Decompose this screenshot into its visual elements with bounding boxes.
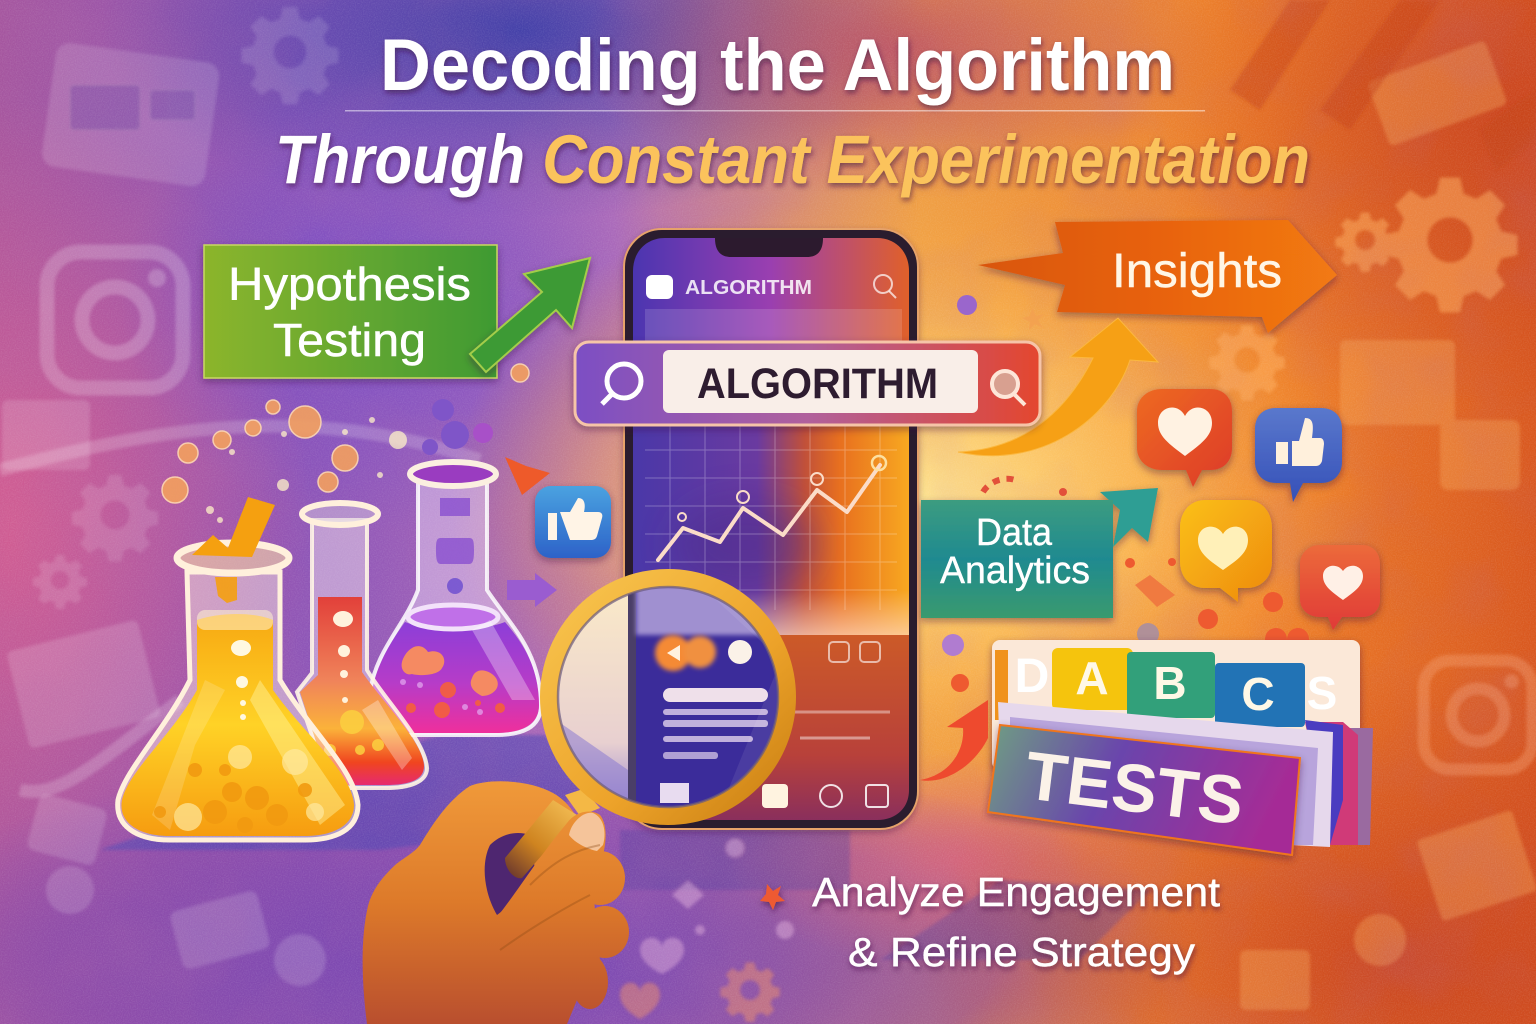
back panel and tabs: B — [1153, 657, 1187, 709]
banner: hypothesis testing — [204, 245, 590, 378]
search bar: ALGORITHM — [697, 360, 938, 408]
banner: hypothesis testing: Testing — [273, 314, 426, 366]
finger gap shadow — [485, 833, 535, 915]
magnifying glass — [549, 578, 787, 816]
icon: search left — [602, 364, 641, 404]
banner: insights arrow — [978, 220, 1337, 333]
icon: search right — [992, 371, 1025, 405]
arrow: green up-right — [470, 258, 590, 372]
app header — [646, 275, 896, 299]
icon: heart bubble small red — [1300, 545, 1380, 630]
phone screen — [633, 238, 909, 820]
phone — [624, 229, 918, 829]
phone notch — [715, 238, 823, 257]
back panel and tabs: S — [1307, 667, 1337, 719]
icon: small star — [760, 884, 785, 910]
arrow: small red left — [505, 457, 550, 495]
banner: data analytics — [921, 488, 1158, 618]
chart panel — [633, 425, 909, 635]
lower screen content — [700, 642, 890, 808]
thumb — [497, 812, 606, 960]
caption: Analyze Engagement — [812, 869, 1221, 915]
front label — [988, 725, 1300, 855]
lens — [556, 585, 781, 810]
bubbles — [162, 364, 529, 523]
banner: data analytics: Analytics — [940, 550, 1090, 592]
title — [275, 25, 1310, 198]
fingers — [572, 851, 629, 1009]
hand — [363, 781, 629, 1024]
back panel and tabs: A — [1075, 652, 1109, 704]
arrow: red to tests — [920, 700, 988, 781]
lens ring — [549, 578, 787, 816]
icon: heart bubble red — [1137, 389, 1232, 487]
back panel and tabs: D — [1015, 650, 1049, 703]
banner: hypothesis testing: Hypothesis — [228, 258, 471, 310]
banner: insights arrow: Insights — [1112, 245, 1282, 298]
title line 2: Through Constant Experimentation — [275, 121, 1310, 198]
flask: purple — [369, 399, 541, 735]
arrow: small purple — [507, 573, 557, 607]
search bar — [575, 342, 1040, 425]
icon: heart bubble yellow — [1180, 500, 1272, 602]
caption — [760, 869, 1221, 975]
icon: thumbs-up bubble blue — [1255, 408, 1342, 502]
palm — [363, 781, 600, 1024]
app header: ALGORITHM — [685, 277, 812, 299]
flask: red tube — [297, 503, 427, 788]
decorative dots — [942, 295, 1309, 692]
icon: like badge left — [535, 486, 611, 558]
arrow: curved orange insights — [958, 318, 1158, 456]
back panel and tabs: C — [1241, 668, 1275, 720]
back panel and tabs — [992, 640, 1360, 770]
thumbnail — [569, 813, 605, 851]
banner: data analytics: Data — [976, 512, 1053, 554]
title line 1: Decoding the Algorithm — [380, 25, 1175, 106]
tests folder — [988, 640, 1373, 855]
tests folder: TESTS — [1021, 737, 1248, 840]
search field — [663, 350, 978, 413]
magnifier handle — [505, 789, 600, 878]
flask: yellow — [118, 497, 358, 840]
folder pages — [998, 702, 1373, 847]
caption: & Refine Strategy — [848, 929, 1196, 975]
